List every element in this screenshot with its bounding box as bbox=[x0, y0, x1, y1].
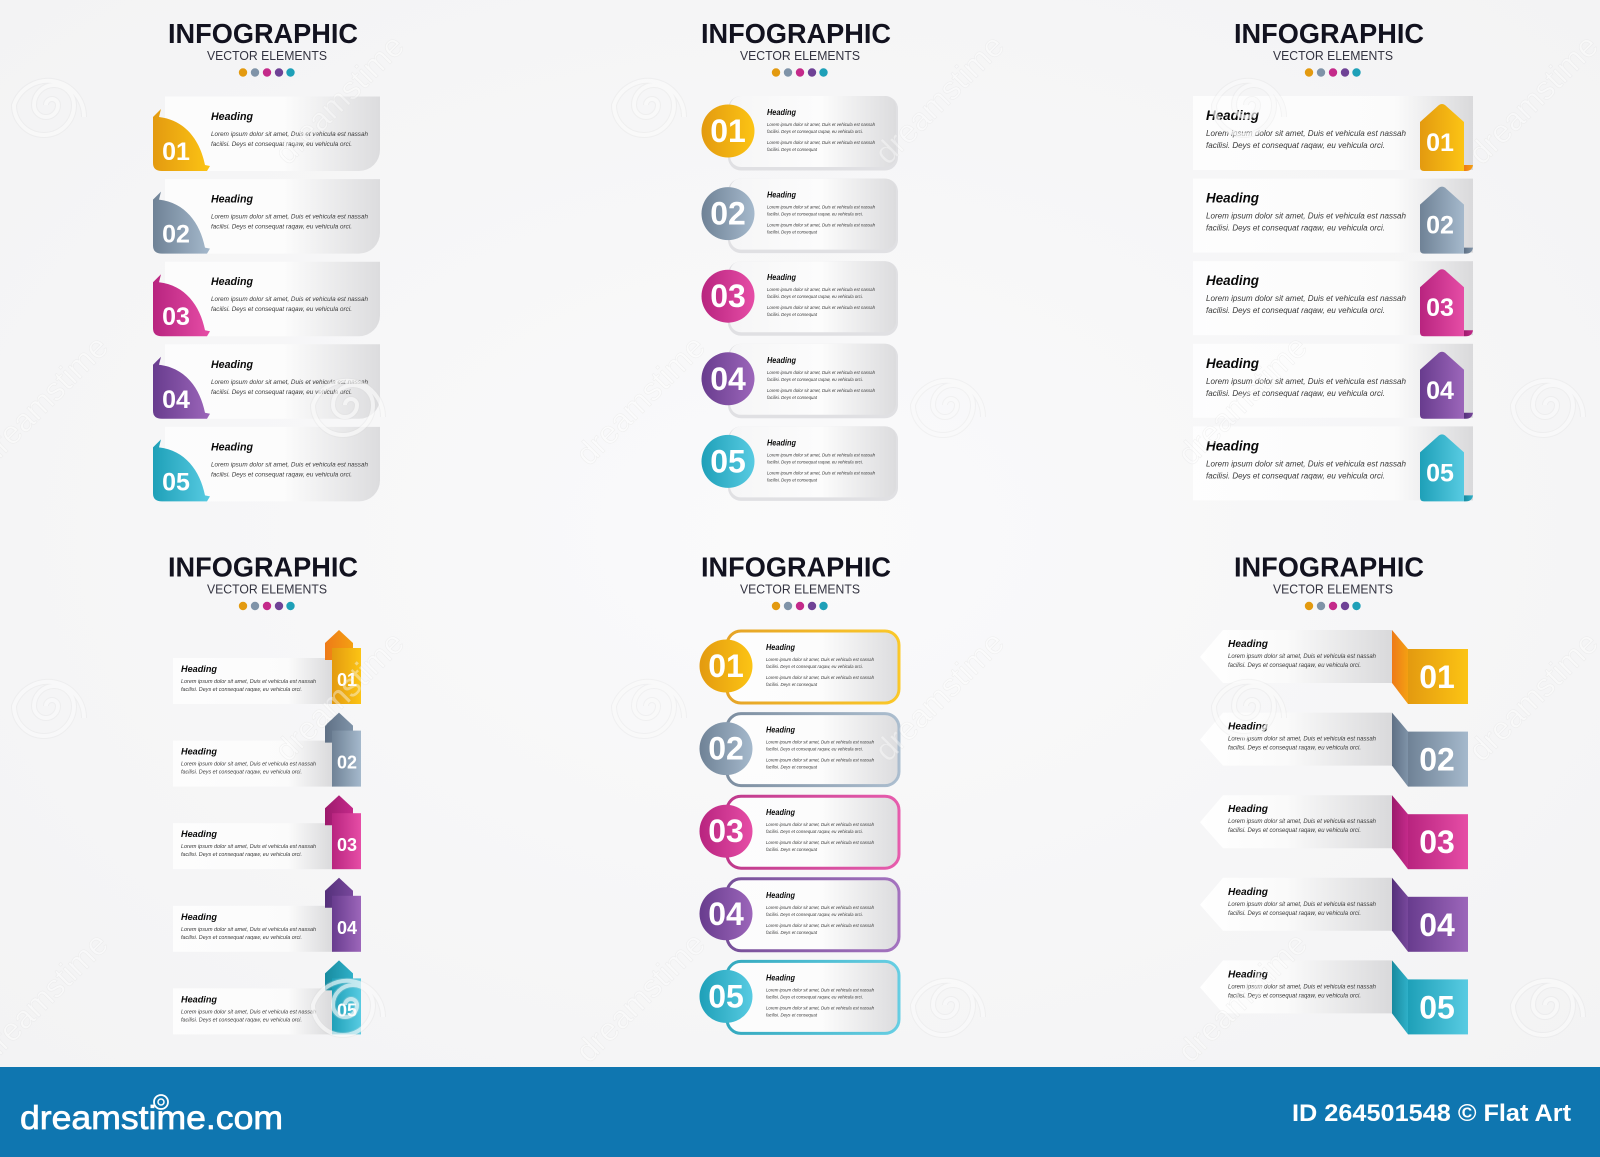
panel 2 row 05 bbox=[702, 426, 898, 501]
panel 1 row 01: facilisi. Deys et consequat raqaw, eu vehicula orci. bbox=[211, 141, 352, 148]
panel 3 row 01: facilisi. Deys et consequat raqaw, eu vehicula orci. bbox=[1206, 141, 1385, 150]
panel 5 row 04: Lorem ipsum dolor sit amet, Duis et vehicula est nassah bbox=[766, 923, 875, 928]
panel 4 row 04: Lorem ipsum dolor sit amet, Duis et vehicula est nassah bbox=[181, 927, 316, 933]
panel 2 row 05: Lorem ipsum dolor sit amet, Duis et vehicula est nassah bbox=[767, 452, 876, 457]
panel 3 row 05: facilisi. Deys et consequat raqaw, eu vehicula orci. bbox=[1206, 471, 1385, 480]
panel 6 row 05: 05 bbox=[1419, 989, 1455, 1025]
panel 2 row 05: Heading bbox=[767, 438, 796, 447]
panel 1 row 01: 01 bbox=[162, 138, 190, 166]
panel 2 row 04: Lorem ipsum dolor sit amet, Duis et vehicula est nassah bbox=[767, 388, 876, 393]
panel 2 row 01: 01 bbox=[710, 113, 746, 149]
panel 3 row 03: Heading bbox=[1206, 272, 1259, 288]
panel 2 row 01: Lorem ipsum dolor sit amet, Duis et vehicula est nassah bbox=[767, 140, 876, 145]
panel 5 row 05: facilisi. Deys et consequat bbox=[766, 1012, 818, 1017]
panel 2 row 04: facilisi. Deys et consequat bbox=[767, 395, 818, 400]
panel 3 row 02: Lorem ipsum dolor sit amet, Duis et vehicula est nassah bbox=[1206, 212, 1407, 221]
panel 1 row 04: Lorem ipsum dolor sit amet, Duis et vehicula est nassah bbox=[211, 379, 368, 386]
panel 6 row 04: 04 bbox=[1419, 907, 1455, 943]
panel 2 row 01: Heading bbox=[767, 108, 796, 117]
panel 5 row 03: facilisi. Deys et consequat raqaw, eu vehicula orci. bbox=[766, 829, 863, 834]
panel 3 row 04: Lorem ipsum dolor sit amet, Duis et vehicula est nassah bbox=[1206, 377, 1407, 386]
panel 1 row 03 bbox=[153, 262, 380, 336]
panel 4 row 03: Lorem ipsum dolor sit amet, Duis et vehicula est nassah bbox=[181, 844, 316, 850]
panel 5 row 02: Lorem ipsum dolor sit amet, Duis et vehicula est nassah bbox=[766, 740, 875, 745]
panel 5 row 05: facilisi. Deys et consequat raqaw, eu vehicula orci. bbox=[766, 994, 863, 999]
panel 5 row 01: Lorem ipsum dolor sit amet, Duis et vehicula est nassah bbox=[766, 657, 875, 662]
panel 1 row 05: Lorem ipsum dolor sit amet, Duis et vehicula est nassah bbox=[211, 461, 368, 468]
panel 1 row 05: Heading bbox=[211, 441, 253, 453]
panel 6 row 02: Heading bbox=[1228, 721, 1269, 733]
panel 2 row 04: Lorem ipsum dolor sit amet, Duis et vehicula est nassah bbox=[767, 370, 876, 375]
panel 5 row 02: Heading bbox=[766, 726, 795, 735]
panel 6 title block: VECTOR ELEMENTS bbox=[1273, 582, 1393, 596]
panel 3 row 03 bbox=[1193, 261, 1473, 336]
panel 3 row 02: 02 bbox=[1426, 212, 1454, 240]
panel 4 row 01: 01 bbox=[337, 670, 357, 690]
panel 1 title block: INFOGRAPHIC bbox=[168, 18, 358, 49]
panel 5 row 03: facilisi. Deys et consequat bbox=[766, 847, 818, 852]
panel 5 row 01: 01 bbox=[708, 648, 744, 684]
footer logo: dreamstime.com bbox=[20, 1099, 283, 1136]
panel 3 row 05 bbox=[1193, 426, 1473, 501]
panel 1 row 01: Lorem ipsum dolor sit amet, Duis et vehicula est nassah bbox=[211, 131, 368, 138]
panel 4 row 05: Lorem ipsum dolor sit amet, Duis et vehicula est nassah bbox=[181, 1009, 316, 1015]
panel 6 row 03: facilisi. Deys et consequat raqaw, eu vehicula orci. bbox=[1228, 828, 1361, 834]
panel 3 row 04 bbox=[1193, 344, 1473, 419]
panel 6 row 01 bbox=[1200, 630, 1468, 704]
panel 6 row 05: Lorem ipsum dolor sit amet, Duis et vehicula est nassah bbox=[1228, 984, 1377, 990]
panel 1 row 01 bbox=[153, 96, 380, 171]
panel 1: folded leaf badges bbox=[153, 18, 380, 501]
panel 1 row 04: Heading bbox=[211, 359, 253, 371]
panel 6 row 03: Lorem ipsum dolor sit amet, Duis et vehicula est nassah bbox=[1228, 819, 1377, 825]
panel 5 row 01: facilisi. Deys et consequat raqaw, eu vehicula orci. bbox=[766, 664, 863, 669]
panel 2 row 03: Heading bbox=[767, 273, 796, 282]
panel 4 row 01: Lorem ipsum dolor sit amet, Duis et vehicula est nassah bbox=[181, 679, 316, 685]
panel 6 title block: INFOGRAPHIC bbox=[1234, 552, 1424, 582]
panel 4 row 05: Heading bbox=[181, 994, 217, 1005]
panel 5 row 04: Lorem ipsum dolor sit amet, Duis et vehicula est nassah bbox=[766, 905, 875, 910]
panel 4 row 01 bbox=[173, 630, 361, 704]
footer bar bbox=[0, 1067, 1600, 1157]
panel 4: up arrow cards bbox=[168, 552, 361, 1034]
panel 5 row 05: Heading bbox=[766, 973, 795, 982]
panel 1 row 03: Lorem ipsum dolor sit amet, Duis et vehicula est nassah bbox=[211, 296, 368, 303]
panel 5 title block bbox=[701, 552, 891, 610]
watermark text: dreamstime bbox=[267, 624, 411, 768]
panel 4 title block: INFOGRAPHIC bbox=[168, 552, 358, 582]
panel 1 row 05: facilisi. Deys et consequat raqaw, eu vehicula orci. bbox=[211, 471, 352, 478]
panel 4 row 03 bbox=[173, 795, 361, 869]
panel 6 row 05: facilisi. Deys et consequat raqaw, eu vehicula orci. bbox=[1228, 993, 1361, 999]
panel 2 row 04: facilisi. Deys et consequat raqaw, eu vehicula orci. bbox=[767, 377, 863, 382]
panel 5 row 03: Lorem ipsum dolor sit amet, Duis et vehicula est nassah bbox=[766, 840, 875, 845]
panel 5 row 04: facilisi. Deys et consequat bbox=[766, 930, 818, 935]
panel 2 row 01: Lorem ipsum dolor sit amet, Duis et vehicula est nassah bbox=[767, 122, 876, 127]
panel 1 row 04 bbox=[153, 344, 380, 419]
panel 6 row 01: Heading bbox=[1228, 638, 1269, 650]
panel 4 row 01: facilisi. Deys et consequat raqaw, eu vehicula orci. bbox=[181, 687, 302, 693]
panel 1 row 02: facilisi. Deys et consequat raqaw, eu vehicula orci. bbox=[211, 224, 352, 231]
panel 2 row 03: facilisi. Deys et consequat bbox=[767, 312, 818, 317]
panel 2 row 01: facilisi. Deys et consequat bbox=[767, 147, 818, 152]
panel 3 title block: VECTOR ELEMENTS bbox=[1273, 48, 1393, 63]
panel 1 row 03: facilisi. Deys et consequat raqaw, eu vehicula orci. bbox=[211, 306, 352, 313]
panel 4 row 03: 03 bbox=[337, 835, 357, 855]
panel 6 row 03 bbox=[1200, 795, 1468, 869]
panel 6 row 04: Lorem ipsum dolor sit amet, Duis et vehicula est nassah bbox=[1228, 902, 1377, 908]
panel 2 row 05: 05 bbox=[710, 443, 746, 479]
panel 2 row 05: Lorem ipsum dolor sit amet, Duis et vehicula est nassah bbox=[767, 470, 876, 475]
panel 2: circle number cards bbox=[701, 18, 898, 501]
panel 4 row 02: 02 bbox=[337, 753, 357, 773]
panel 6 row 02: facilisi. Deys et consequat raqaw, eu vehicula orci. bbox=[1228, 746, 1361, 752]
panel 3 row 04: 04 bbox=[1426, 377, 1454, 405]
panel 5 row 03: Heading bbox=[766, 808, 795, 817]
panel 6 row 02: 02 bbox=[1419, 742, 1455, 778]
panel 4 row 03: facilisi. Deys et consequat raqaw, eu vehicula orci. bbox=[181, 852, 302, 858]
panel 3 row 04: Heading bbox=[1206, 355, 1259, 371]
panel 3 row 05: Heading bbox=[1206, 437, 1259, 453]
panel 2 row 05: facilisi. Deys et consequat bbox=[767, 477, 818, 482]
panel 6 title block bbox=[1234, 552, 1424, 610]
panel 2 row 03: Lorem ipsum dolor sit amet, Duis et vehicula est nassah bbox=[767, 287, 876, 292]
panel 5 row 01 bbox=[700, 631, 899, 703]
panel 5 row 02: 02 bbox=[708, 731, 744, 767]
panel 2 row 03: Lorem ipsum dolor sit amet, Duis et vehicula est nassah bbox=[767, 305, 876, 310]
panel 5 row 02: Lorem ipsum dolor sit amet, Duis et vehicula est nassah bbox=[766, 758, 875, 763]
panel 5 row 05: Lorem ipsum dolor sit amet, Duis et vehicula est nassah bbox=[766, 987, 875, 992]
panel 4 row 03: Heading bbox=[181, 829, 217, 840]
panel 2 row 03: facilisi. Deys et consequat raqaw, eu vehicula orci. bbox=[767, 294, 863, 299]
panel 4 row 02: Lorem ipsum dolor sit amet, Duis et vehicula est nassah bbox=[181, 762, 316, 768]
panel 4 row 04: 04 bbox=[337, 918, 357, 938]
panel 4 row 04: Heading bbox=[181, 912, 217, 923]
panel 2 row 02: facilisi. Deys et consequat raqaw, eu vehicula orci. bbox=[767, 212, 863, 217]
panel 1 row 02 bbox=[153, 179, 380, 254]
panel 1 row 05 bbox=[153, 427, 380, 501]
panel 5 row 05: 05 bbox=[708, 978, 744, 1014]
panel 4 row 02: facilisi. Deys et consequat raqaw, eu vehicula orci. bbox=[181, 770, 302, 776]
panel 2 row 05: facilisi. Deys et consequat raqaw, eu vehicula orci. bbox=[767, 459, 863, 464]
panel 2 row 02 bbox=[702, 179, 898, 253]
panel 5 row 04: 04 bbox=[708, 896, 744, 932]
watermark text: dreamstime bbox=[267, 27, 411, 171]
watermark text: dreamstime bbox=[568, 328, 712, 472]
panel 6 row 03: Heading bbox=[1228, 803, 1269, 815]
panel 5 row 02: facilisi. Deys et consequat raqaw, eu vehicula orci. bbox=[766, 747, 863, 752]
panel 2 row 02: Lorem ipsum dolor sit amet, Duis et vehicula est nassah bbox=[767, 223, 876, 228]
panel 3 title block: INFOGRAPHIC bbox=[1234, 18, 1424, 49]
panel 4 row 04: facilisi. Deys et consequat raqaw, eu vehicula orci. bbox=[181, 935, 302, 941]
panel 4 row 04 bbox=[173, 878, 361, 952]
panel 6 row 01: 01 bbox=[1419, 659, 1455, 695]
panel 3 row 03: Lorem ipsum dolor sit amet, Duis et vehicula est nassah bbox=[1206, 294, 1407, 303]
panel 3: pentagon tag cards bbox=[1193, 18, 1473, 501]
panel 6 row 02: Lorem ipsum dolor sit amet, Duis et vehicula est nassah bbox=[1228, 737, 1377, 743]
panel 4 row 05: 05 bbox=[337, 1000, 357, 1020]
panel 6 row 01: facilisi. Deys et consequat raqaw, eu vehicula orci. bbox=[1228, 663, 1361, 669]
panel 2 row 01 bbox=[702, 96, 898, 170]
panel 5 row 03: Lorem ipsum dolor sit amet, Duis et vehicula est nassah bbox=[766, 822, 875, 827]
panel 2 title block: INFOGRAPHIC bbox=[701, 18, 891, 49]
panel 4 row 02 bbox=[173, 713, 361, 787]
panel 5 row 03: 03 bbox=[708, 813, 744, 849]
panel 2 row 04 bbox=[702, 344, 898, 418]
panel 4 title block bbox=[168, 552, 358, 610]
panel 1 row 02: 02 bbox=[162, 221, 190, 249]
panel 1 row 03: 03 bbox=[162, 303, 190, 331]
panel 4 title block: VECTOR ELEMENTS bbox=[207, 582, 327, 596]
panel 5 row 04: facilisi. Deys et consequat raqaw, eu vehicula orci. bbox=[766, 912, 863, 917]
panel 2 row 02: Lorem ipsum dolor sit amet, Duis et vehicula est nassah bbox=[767, 205, 876, 210]
watermark text: dreamstime bbox=[1170, 328, 1314, 472]
panel 1 title block: VECTOR ELEMENTS bbox=[207, 48, 327, 63]
panel 2 row 01: facilisi. Deys et consequat raqaw, eu vehicula orci. bbox=[767, 129, 863, 134]
panel 5 row 04 bbox=[700, 879, 899, 951]
panel 5 row 05 bbox=[700, 961, 899, 1033]
panel 4 row 05: facilisi. Deys et consequat raqaw, eu vehicula orci. bbox=[181, 1017, 302, 1023]
panel 4 row 02: Heading bbox=[181, 747, 217, 758]
panel 6 row 01: Lorem ipsum dolor sit amet, Duis et vehicula est nassah bbox=[1228, 654, 1377, 660]
panel 3 row 02: facilisi. Deys et consequat raqaw, eu vehicula orci. bbox=[1206, 224, 1385, 233]
panel 3 row 05: Lorem ipsum dolor sit amet, Duis et vehicula est nassah bbox=[1206, 459, 1407, 468]
panel 5 row 03 bbox=[700, 796, 899, 868]
panel 4 row 05 bbox=[173, 960, 361, 1034]
panel 6 row 05: Heading bbox=[1228, 968, 1269, 980]
panel 5 title block: INFOGRAPHIC bbox=[701, 552, 891, 582]
panel 1 row 01: Heading bbox=[211, 111, 253, 123]
panel 3 row 01: 01 bbox=[1426, 129, 1454, 157]
panel 5 row 01: Lorem ipsum dolor sit amet, Duis et vehicula est nassah bbox=[766, 675, 875, 680]
panel 3 row 03: 03 bbox=[1426, 294, 1454, 322]
panel 1 row 02: Lorem ipsum dolor sit amet, Duis et vehicula est nassah bbox=[211, 214, 368, 221]
panel 1 title block bbox=[168, 18, 358, 77]
panel 1 row 05: 05 bbox=[162, 468, 190, 496]
panel 6 row 03: 03 bbox=[1419, 824, 1455, 860]
panel 2 row 02: Heading bbox=[767, 191, 796, 200]
panel 6: ribbon fold cards bbox=[1200, 552, 1468, 1034]
watermark text: dreamstime bbox=[867, 27, 1011, 171]
panel 6 row 04: Heading bbox=[1228, 886, 1269, 898]
panel 5 row 01: facilisi. Deys et consequat bbox=[766, 682, 818, 687]
panel 6 row 02 bbox=[1200, 713, 1468, 787]
panel 3 row 03: facilisi. Deys et consequat raqaw, eu vehicula orci. bbox=[1206, 306, 1385, 315]
panel 6 row 04: facilisi. Deys et consequat raqaw, eu vehicula orci. bbox=[1228, 911, 1361, 917]
panel 3 row 01: Lorem ipsum dolor sit amet, Duis et vehicula est nassah bbox=[1206, 129, 1407, 138]
panel 1 row 04: facilisi. Deys et consequat raqaw, eu vehicula orci. bbox=[211, 389, 352, 396]
panel 5: outlined cards with circles bbox=[700, 552, 899, 1033]
panel 5 row 01: Heading bbox=[766, 643, 795, 652]
panel 3 row 04: facilisi. Deys et consequat raqaw, eu vehicula orci. bbox=[1206, 389, 1385, 398]
panel 5 row 04: Heading bbox=[766, 891, 795, 900]
panel 2 row 03 bbox=[702, 261, 898, 336]
panel 3 title block bbox=[1234, 18, 1424, 77]
panel 1 row 02: Heading bbox=[211, 194, 253, 206]
panel 5 row 05: Lorem ipsum dolor sit amet, Duis et vehicula est nassah bbox=[766, 1005, 875, 1010]
panel 3 row 01 bbox=[1193, 96, 1473, 171]
panel 2 title block bbox=[701, 18, 891, 77]
panel 2 title block: VECTOR ELEMENTS bbox=[740, 48, 860, 63]
panel 5 title block: VECTOR ELEMENTS bbox=[740, 582, 860, 596]
panel 2 row 02: 02 bbox=[710, 196, 746, 232]
panel 5 row 02 bbox=[700, 714, 899, 786]
watermark text: dreamstime bbox=[568, 925, 712, 1069]
watermark text: dreamstime bbox=[1170, 925, 1314, 1069]
panel 3 row 01: Heading bbox=[1206, 107, 1259, 123]
panel 3 row 02: Heading bbox=[1206, 190, 1259, 206]
panel 6 row 04 bbox=[1200, 878, 1468, 952]
panel 6 row 05 bbox=[1200, 960, 1468, 1034]
footer image id credit: ID 264501548 © Flat Art bbox=[1292, 1100, 1571, 1127]
panel 2 row 04: Heading bbox=[767, 356, 796, 365]
panel 2 row 04: 04 bbox=[710, 361, 746, 397]
panel 2 row 02: facilisi. Deys et consequat bbox=[767, 230, 818, 235]
panel 1 row 03: Heading bbox=[211, 276, 253, 288]
panel 5 row 02: facilisi. Deys et consequat bbox=[766, 765, 818, 770]
panel 3 row 02 bbox=[1193, 179, 1473, 254]
panel 1 row 04: 04 bbox=[162, 386, 190, 414]
panel 4 row 01: Heading bbox=[181, 664, 217, 675]
panel 3 row 05: 05 bbox=[1426, 459, 1454, 487]
panel 2 row 03: 03 bbox=[710, 278, 746, 314]
watermark text: dreamstime bbox=[867, 624, 1011, 768]
